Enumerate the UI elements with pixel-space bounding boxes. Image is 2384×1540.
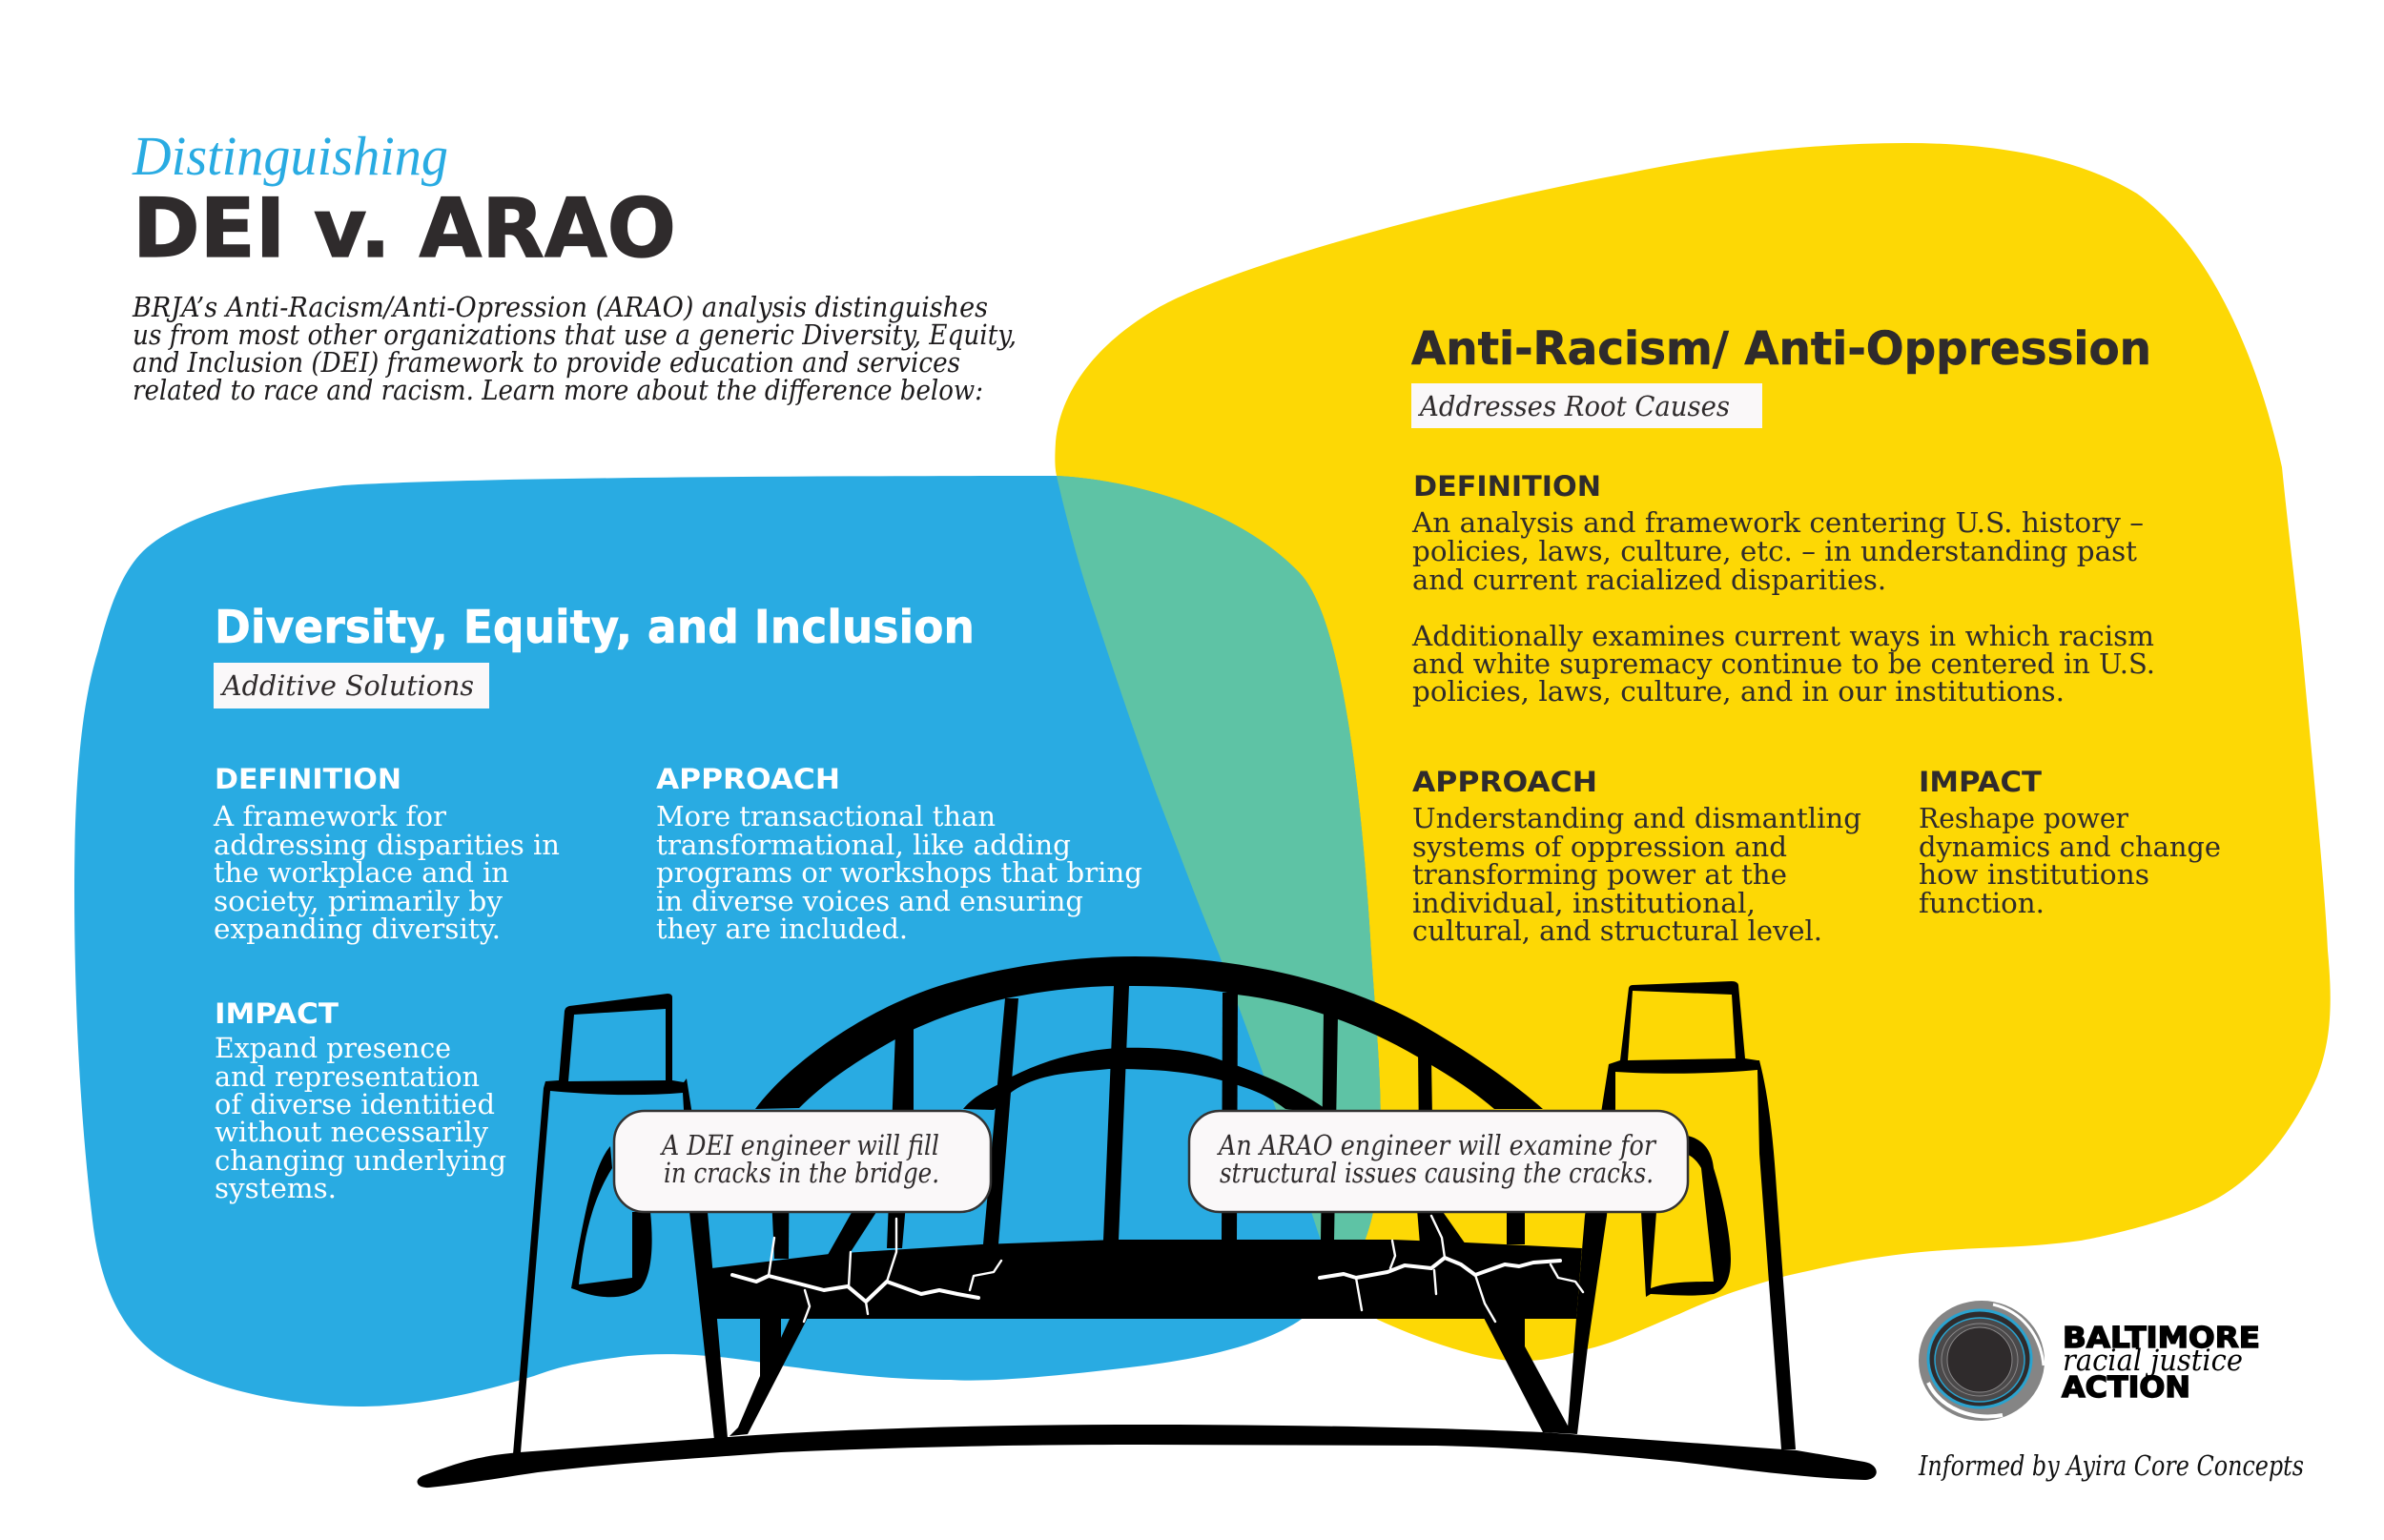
ARAO impact (1919, 766, 2221, 919)
crack: right (1320, 1216, 1583, 1322)
yellow blob (1055, 143, 2331, 1361)
logo wordmark: racial justice (2063, 1344, 2243, 1378)
ARAO impact: IMPACT (1919, 766, 2042, 798)
panel: Anti-Racism / Anti-Oppression (1055, 143, 2331, 1361)
lower struts (730, 1316, 1577, 1436)
deck (711, 1240, 1582, 1319)
DEI approach (656, 763, 1142, 945)
crack: left (732, 1219, 1001, 1322)
ARAO definition: and white supremacy continue to be centered in U.S. (1412, 647, 2155, 680)
intro paragraph (132, 291, 1017, 406)
DEI definition: the workplace and in (214, 856, 509, 889)
ARAO approach: APPROACH (1412, 766, 1597, 798)
DEI approach: programs or workshops that bring (656, 856, 1142, 889)
credit line: Informed by Ayira Core Concepts (1918, 1449, 2304, 1482)
DEI impact: changing underlying (215, 1144, 506, 1177)
DEI impact (215, 997, 506, 1204)
DEI impact: without necessarily (215, 1116, 489, 1148)
icon: cracked bridge (418, 956, 1877, 1488)
logo: Baltimore Racial Justice Action (1919, 1301, 2260, 1421)
ARAO definition: An analysis and framework centering U.S. history – (1411, 506, 2144, 539)
ARAO impact: function. (1919, 887, 2045, 919)
logo wordmark: BALTIMORE (2063, 1322, 2260, 1355)
right tower (1568, 981, 1796, 1449)
DEI impact: systems. (215, 1172, 337, 1204)
overlap of DEI and ARAO blobs (1057, 476, 1381, 1240)
DEI tagline: Additive Solutions (219, 669, 474, 702)
callout: DEI engineer: A DEI engineer will fill (659, 1129, 939, 1161)
logo wordmark: ACTION (2062, 1371, 2190, 1405)
ARAO definition: policies, laws, culture, and in our institutions. (1412, 675, 2065, 708)
kicker: Distinguishing: Distinguishing (132, 125, 448, 187)
ARAO heading: Anti-Racism/ Anti-Oppression (1411, 322, 2151, 376)
ARAO impact: Reshape power (1919, 802, 2128, 834)
ARAO definition: Additionally examines current ways in which racism (1411, 620, 2154, 652)
intro paragraph: BRJA’s Anti-Racism/Anti-Opression (ARAO) analysis distinguishes (132, 291, 988, 323)
DEI definition: A framework for (213, 800, 446, 832)
DEI approach: transformational, like adding (656, 829, 1071, 861)
DEI approach: More transactional than (656, 800, 996, 832)
hangers (768, 986, 1525, 1259)
DEI definition: addressing disparities in (214, 829, 560, 861)
ARAO approach: Understanding and dismantling (1412, 802, 1861, 834)
ARAO definition: and current racialized disparities. (1412, 564, 1886, 596)
DEI impact: IMPACT (215, 997, 339, 1030)
DEI approach: in diverse voices and ensuring (656, 885, 1083, 917)
DEI definition: DEFINITION (215, 763, 401, 795)
DEI impact: and representation (215, 1060, 480, 1093)
intro paragraph: related to race and racism. Learn more about the difference below: (133, 374, 983, 406)
ARAO approach: systems of oppression and (1412, 831, 1787, 863)
callout: ARAO engineer (1189, 1111, 1688, 1212)
arches (755, 956, 1543, 1116)
bridge ground (418, 1425, 1877, 1488)
ARAO impact: dynamics and change (1919, 831, 2221, 863)
DEI impact: of diverse identitied (215, 1088, 495, 1120)
DEI definition: society, primarily by (214, 885, 504, 917)
DEI heading: Diversity, Equity, and Inclusion (215, 601, 975, 654)
DEI approach: they are included. (656, 913, 908, 945)
DEI definition (213, 763, 560, 945)
ARAO definition: DEFINITION (1413, 470, 1601, 503)
logo wordmark (2062, 1322, 2260, 1405)
ARAO tagline (1411, 383, 1762, 428)
ARAO approach: cultural, and structural level. (1412, 914, 1822, 947)
heading block (132, 125, 1017, 406)
callout: DEI engineer: in cracks in the bridge. (664, 1157, 939, 1189)
title: DEI v. ARAO (133, 181, 676, 277)
ARAO definition: policies, laws, culture, etc. – in understanding past (1412, 535, 2137, 567)
blue blob (74, 476, 1381, 1407)
ARAO approach (1412, 766, 1861, 947)
logo swirl icon (1919, 1301, 2045, 1421)
DEI impact: Expand presence (215, 1032, 451, 1064)
callout: ARAO engineer: structural issues causing the cracks. (1220, 1157, 1654, 1189)
left tower (513, 994, 728, 1454)
ARAO tagline: Addresses Root Causes (1417, 390, 1730, 422)
callout: ARAO engineer: An ARAO engineer will examine for (1216, 1129, 1657, 1161)
DEI definition: expanding diversity. (214, 913, 501, 945)
DEI approach: APPROACH (656, 763, 840, 795)
ARAO impact: how institutions (1919, 858, 2149, 891)
intro paragraph: and Inclusion (DEI) framework to provide education and services (133, 346, 960, 379)
ARAO approach: transforming power at the (1412, 858, 1787, 891)
callout: DEI engineer (614, 1111, 991, 1212)
intro paragraph: us from most other organizations that use a generic Diversity, Equity, (133, 318, 1017, 351)
DEI tagline (214, 663, 489, 708)
ARAO definition (1411, 470, 2155, 708)
panel: Diversity, Equity, and Inclusion (74, 476, 1381, 1407)
ARAO approach: individual, institutional, (1412, 887, 1756, 919)
